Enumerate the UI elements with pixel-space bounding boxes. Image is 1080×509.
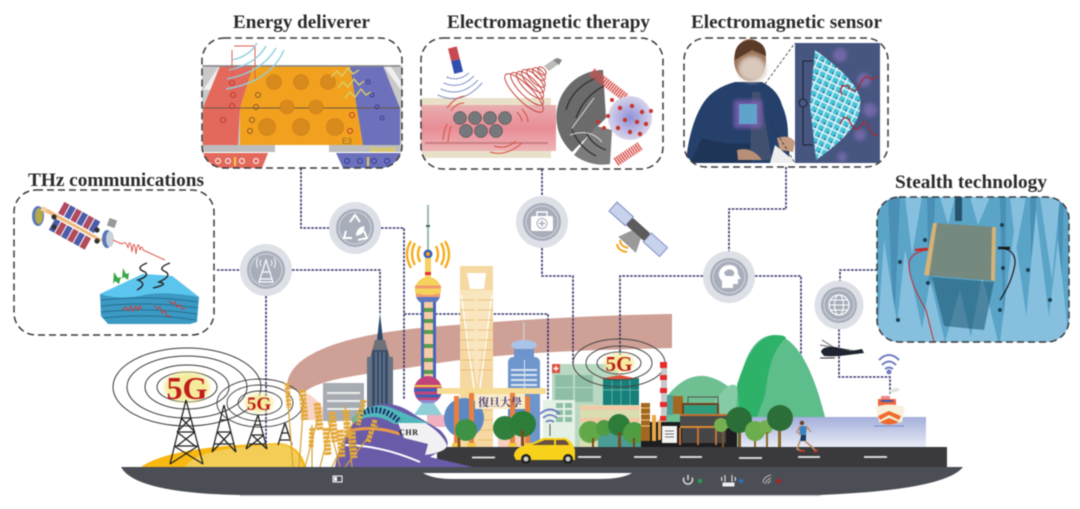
lower contacts bbox=[204, 146, 400, 152]
coil cone bbox=[504, 66, 548, 114]
head bbox=[734, 39, 766, 81]
Oriental Pearl tower bbox=[407, 205, 449, 427]
5G label large: 5G bbox=[167, 370, 208, 406]
icon: wifi bbox=[763, 475, 771, 484]
field and 5G towers bbox=[113, 348, 306, 467]
zigzag waves bbox=[331, 68, 371, 98]
gate inscription: 復旦大學 bbox=[478, 394, 522, 410]
connector lines bbox=[217, 167, 890, 443]
5G rings large bbox=[113, 348, 261, 426]
absorber device bbox=[932, 277, 994, 330]
World Financial Center bbox=[460, 266, 493, 447]
magnetic field arcs bbox=[438, 73, 482, 99]
high speed train bbox=[335, 404, 473, 467]
5G rings over hospital bbox=[573, 339, 665, 387]
undulator bbox=[32, 194, 117, 256]
panel: energy deliverer bbox=[202, 38, 402, 175]
red nanotubes bbox=[592, 72, 640, 162]
panel: electromagnetic sensor bbox=[684, 38, 888, 167]
blue rotunda bbox=[444, 398, 484, 438]
icon: battery bbox=[333, 476, 342, 482]
red electrode bbox=[203, 66, 253, 145]
trees near water bbox=[714, 405, 793, 447]
nanoparticles bbox=[454, 112, 512, 138]
skyscraper and building bbox=[323, 313, 393, 422]
icon: router bbox=[722, 475, 736, 486]
black squiggles bbox=[137, 263, 170, 290]
THz wave bbox=[113, 240, 165, 260]
blue tower bbox=[444, 322, 540, 447]
device base bbox=[121, 467, 963, 496]
heading: Electromagnetic therapy: Electromagnetic therapy bbox=[447, 12, 650, 33]
helicopter bbox=[820, 340, 864, 358]
satellite bbox=[600, 202, 668, 266]
seated person bbox=[686, 82, 790, 163]
wifi signal at car bbox=[540, 410, 560, 436]
heading: Stealth technology: Stealth technology bbox=[895, 172, 1048, 193]
chest lattice bbox=[734, 100, 762, 128]
icon: cell tower circle bbox=[240, 244, 292, 296]
green hills bbox=[664, 335, 825, 447]
icon: power bbox=[684, 475, 692, 484]
wave arcs bbox=[226, 43, 284, 89]
white slot bbox=[423, 473, 632, 479]
icon: medical kit circle bbox=[516, 196, 568, 248]
water bbox=[740, 417, 926, 447]
panel: energy deliverer: Current bbox=[370, 147, 396, 154]
wifi arcs orange bbox=[407, 241, 449, 268]
green leaves bbox=[113, 268, 129, 284]
heading: THz communications: THz communications bbox=[28, 170, 204, 191]
blood vessel bbox=[421, 98, 551, 158]
zoom lens bbox=[556, 70, 650, 164]
magnet bbox=[448, 46, 463, 74]
pink curved band bbox=[287, 314, 672, 420]
heading: Electromagnetic sensor: Electromagnetic sensor bbox=[691, 12, 883, 33]
icon: globe circle bbox=[814, 280, 864, 330]
yellow car bbox=[514, 438, 575, 464]
inset bbox=[795, 43, 880, 163]
university gate bbox=[437, 388, 546, 447]
icon: ship wifi signal bbox=[879, 355, 899, 374]
panel: stealth technology bbox=[877, 197, 1069, 342]
ship bbox=[874, 388, 905, 426]
5G label small: 5G bbox=[247, 394, 271, 415]
icon: recycle circle bbox=[329, 202, 381, 254]
lattice towers bbox=[170, 400, 292, 464]
CHR label: CHR bbox=[399, 428, 419, 437]
red and white chimney bbox=[660, 362, 667, 430]
hospital and teal building bbox=[543, 364, 646, 449]
road bbox=[437, 447, 947, 467]
trees bbox=[455, 411, 645, 447]
5G label center: 5G bbox=[606, 352, 632, 376]
MXene block bbox=[100, 274, 199, 324]
blue electrode bbox=[350, 66, 400, 145]
icon: brain head circle bbox=[703, 251, 755, 303]
panel: THz communications bbox=[14, 190, 214, 335]
lead wires bbox=[909, 250, 934, 342]
lattice bbox=[810, 50, 860, 160]
wheat bbox=[287, 383, 378, 467]
runner bbox=[797, 421, 818, 452]
hands bbox=[737, 149, 762, 160]
panel: energy deliverer: E3 bbox=[342, 137, 352, 146]
5G rings small bbox=[217, 379, 303, 427]
heading: Energy deliverer: Energy deliverer bbox=[233, 12, 371, 33]
orange active layer bbox=[240, 66, 363, 145]
panel: electromagnetic therapy bbox=[421, 38, 663, 169]
factory bbox=[641, 395, 737, 447]
